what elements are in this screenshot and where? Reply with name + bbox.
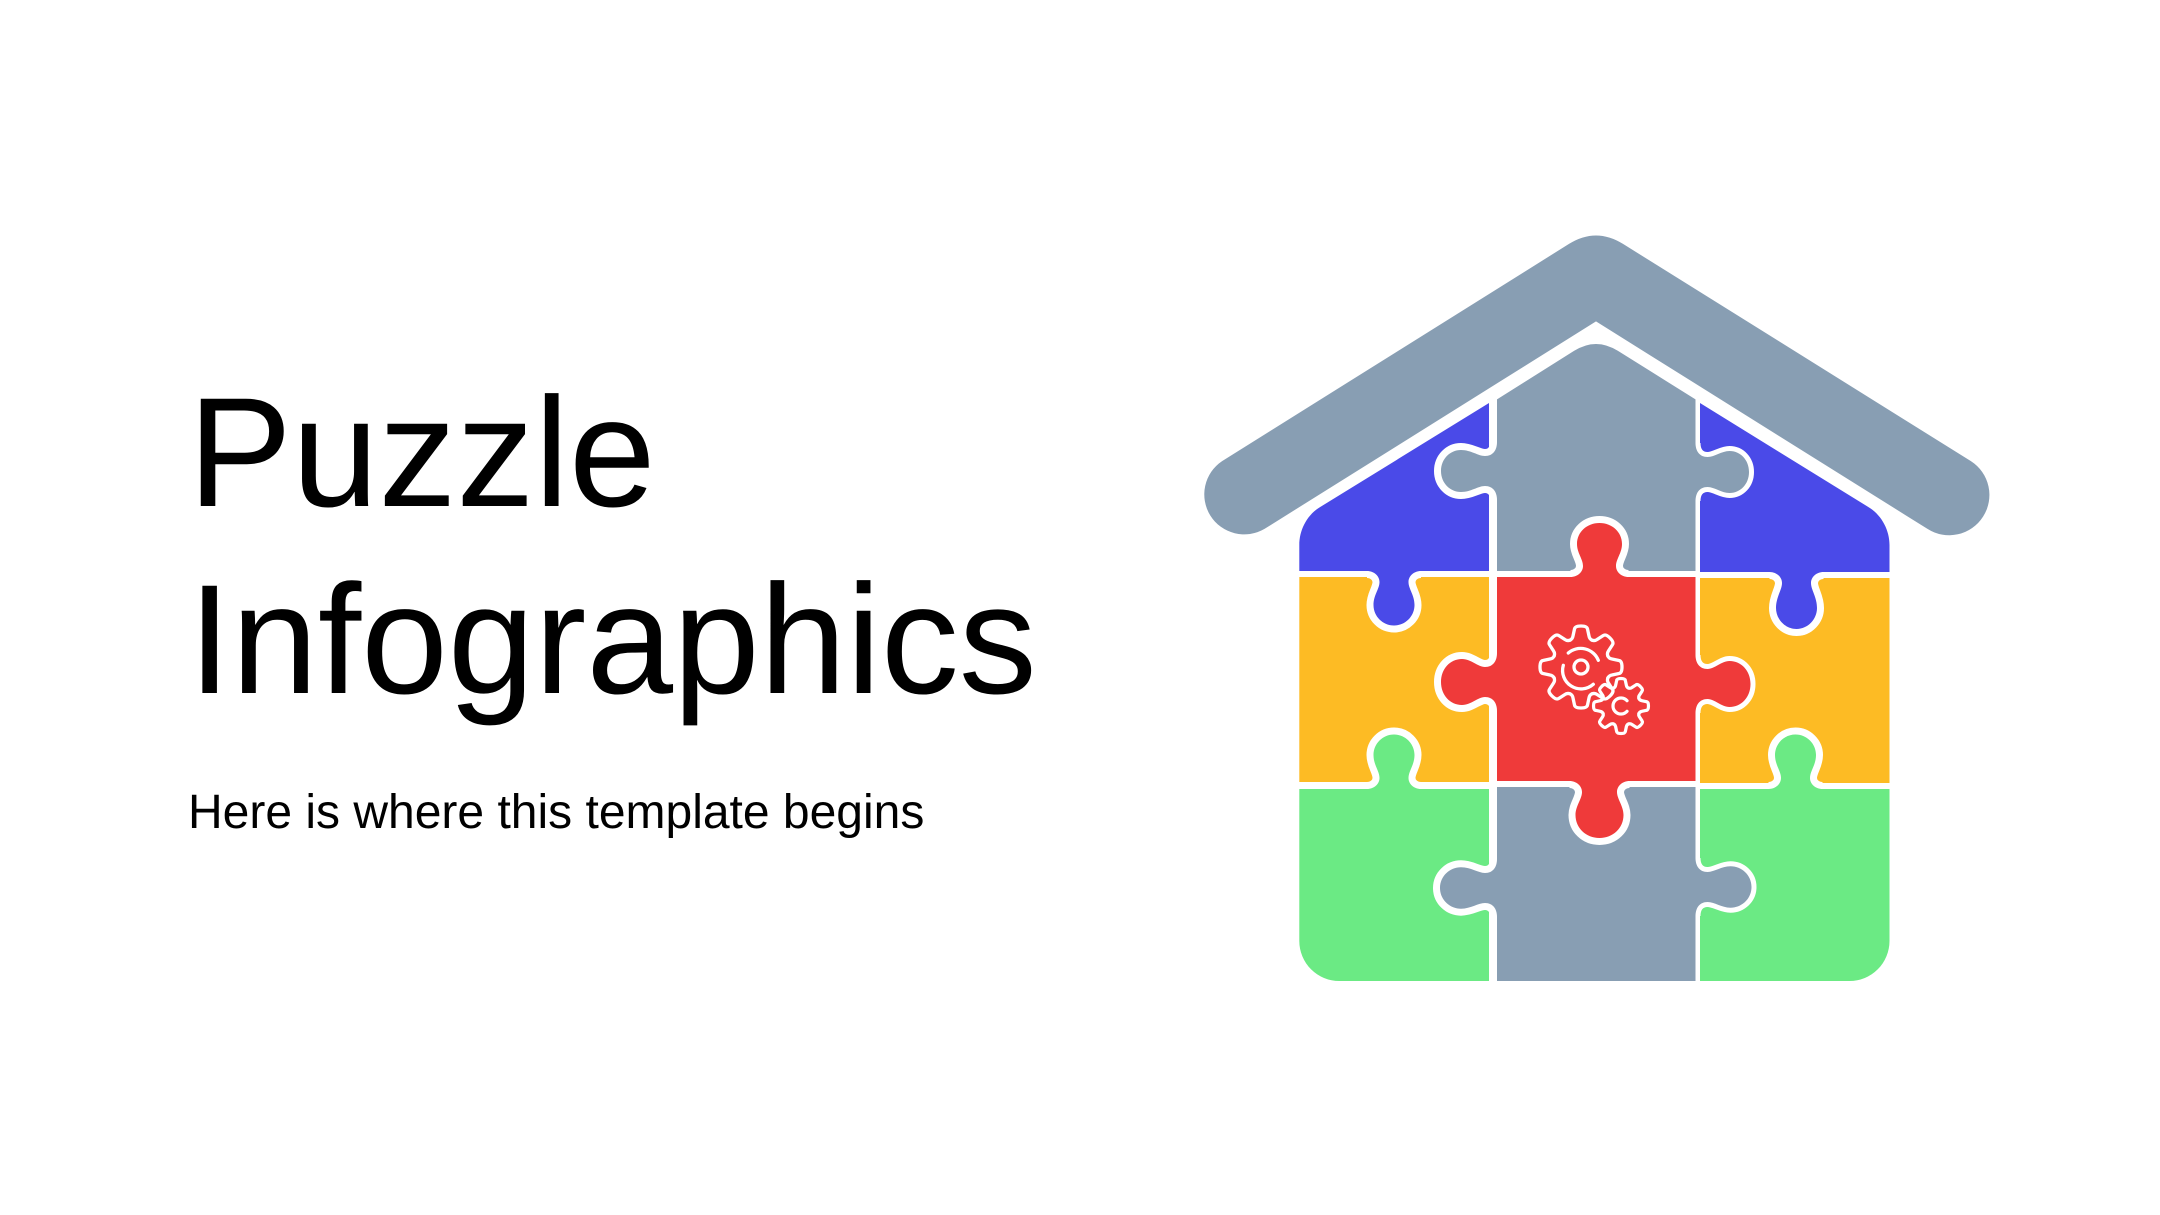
house puzzle illustration — [1204, 236, 1990, 981]
tab: red down — [1570, 781, 1630, 838]
small gear — [1594, 679, 1648, 733]
puzzle piece: top centre grey — [1497, 344, 1696, 571]
tab: grey upper right — [1696, 443, 1749, 501]
subtitle: Here is where this template begins — [188, 786, 924, 839]
icon: gears — [1540, 626, 1648, 733]
tab: red up — [1570, 523, 1628, 577]
puzzle piece: middle right yellow — [1700, 578, 1890, 783]
puzzle piece: bottom left green — [1299, 789, 1489, 981]
puzzle piece: middle centre red — [1497, 577, 1696, 781]
tab: grey lower left — [1440, 859, 1497, 917]
tab: blue right down — [1770, 572, 1824, 629]
tab: grey upper left — [1441, 442, 1497, 500]
tab: blue left down — [1367, 571, 1421, 626]
puzzle piece: bottom right green — [1700, 789, 1890, 981]
puzzle piece: top left blue — [1299, 403, 1489, 571]
tab: grey lower right — [1696, 858, 1752, 916]
tab: red right — [1696, 655, 1750, 713]
puzzle piece: bottom centre grey — [1497, 787, 1696, 981]
roof — [1204, 235, 1989, 535]
large gear — [1540, 626, 1622, 708]
title: Infographics — [188, 553, 1037, 727]
tab: green left up — [1367, 734, 1421, 789]
tab: green right up — [1768, 734, 1822, 789]
title: Puzzle — [188, 366, 656, 540]
puzzle piece: top right blue — [1700, 403, 1890, 572]
title — [188, 366, 1037, 727]
tab: red left — [1441, 653, 1497, 711]
puzzle piece: middle left yellow — [1299, 577, 1489, 782]
